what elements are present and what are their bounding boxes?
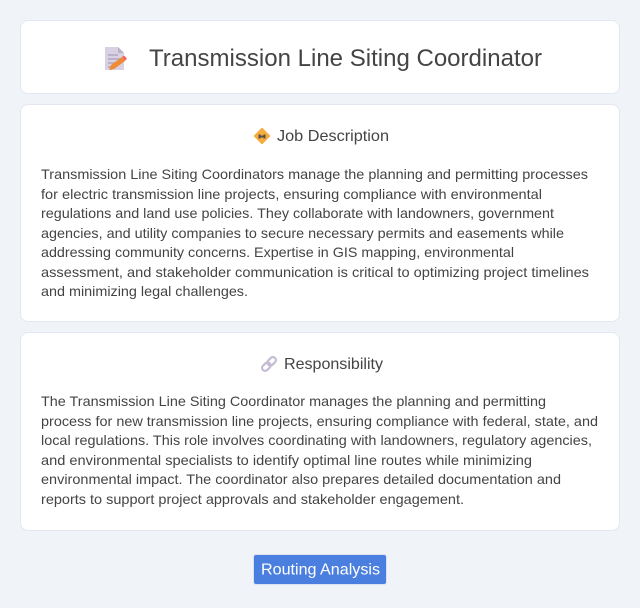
- text block: job description: assessment, and stakeholder communication is critical to optimizing project timelines: [41, 264, 589, 280]
- icon: document with pencil: [105, 47, 127, 70]
- text block: responsibility: environmental impact. The coordinator also prepares detailed documentation and: [41, 471, 561, 487]
- text block: job description: and minimizing legal challenges.: [41, 283, 248, 299]
- text block: responsibility: reports to support project approvals and stakeholder engagement.: [41, 491, 464, 507]
- text block: responsibility: and environmental specialists to identify optimal line routes while minimizing: [41, 452, 532, 468]
- text block: job description: for electric transmission line projects, ensuring compliance with environmental: [41, 186, 542, 202]
- icon: chain link: [261, 356, 277, 372]
- text block: job description: regulations and land use policies. They collaborate with landowners, government: [41, 205, 554, 221]
- panel: title header: [20, 20, 620, 94]
- text block: responsibility: The Transmission Line Siting Coordinator manages the planning and permitting: [41, 393, 546, 409]
- button: routing analysis: Routing Analysis: [261, 562, 380, 578]
- heading: responsibility: Responsibility: [284, 356, 383, 373]
- panel: responsibility: [20, 332, 620, 531]
- icon: orange diamond sign: [254, 128, 270, 144]
- text block: responsibility: [41, 393, 598, 507]
- button: routing analysis: [253, 554, 387, 585]
- title: Transmission Line Siting Coordinator: [149, 45, 542, 72]
- text block: job description: Transmission Line Siting Coordinators manage the planning and permitting processes: [41, 166, 588, 182]
- text block: job description: [41, 166, 589, 299]
- heading: job description: Job Description: [277, 128, 389, 145]
- text block: job description: addressing community concerns. Expertise in GIS mapping, environmental: [41, 244, 514, 260]
- text block: responsibility: process for new transmission line projects, ensuring compliance with federal, state, and: [41, 413, 598, 429]
- panel: job description: [20, 104, 620, 322]
- text block: job description: agencies, and utility companies to secure necessary permits and easements while: [41, 225, 564, 241]
- text block: responsibility: local regulations. This role involves coordinating with landowners, regulatory agencies,: [41, 432, 592, 448]
